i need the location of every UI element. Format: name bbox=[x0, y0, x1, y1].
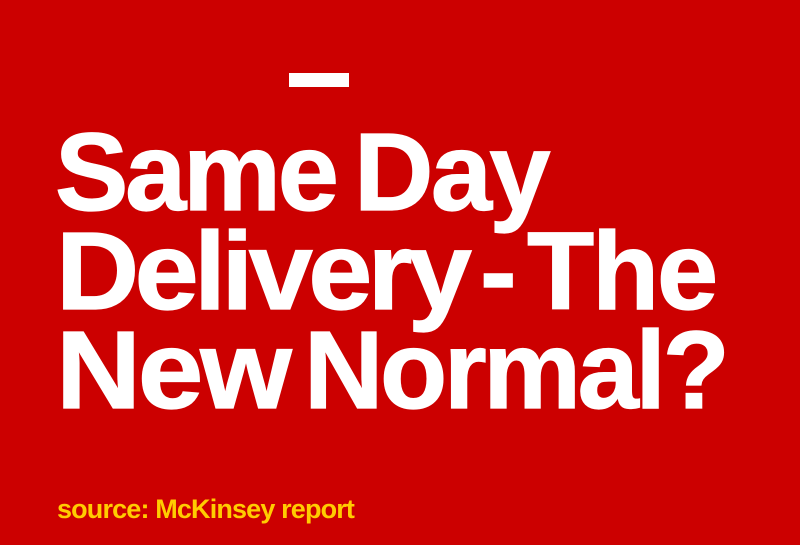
title: Delivery bbox=[56, 210, 467, 333]
title bbox=[55, 111, 726, 432]
title: New bbox=[56, 309, 289, 432]
title: The bbox=[527, 210, 716, 333]
title: Same bbox=[55, 111, 336, 234]
title: Normal? bbox=[304, 309, 726, 432]
title: - bbox=[480, 210, 517, 333]
source note: source: McKinsey report bbox=[57, 494, 354, 524]
title: Day bbox=[354, 111, 548, 234]
accent bar bbox=[289, 73, 349, 87]
